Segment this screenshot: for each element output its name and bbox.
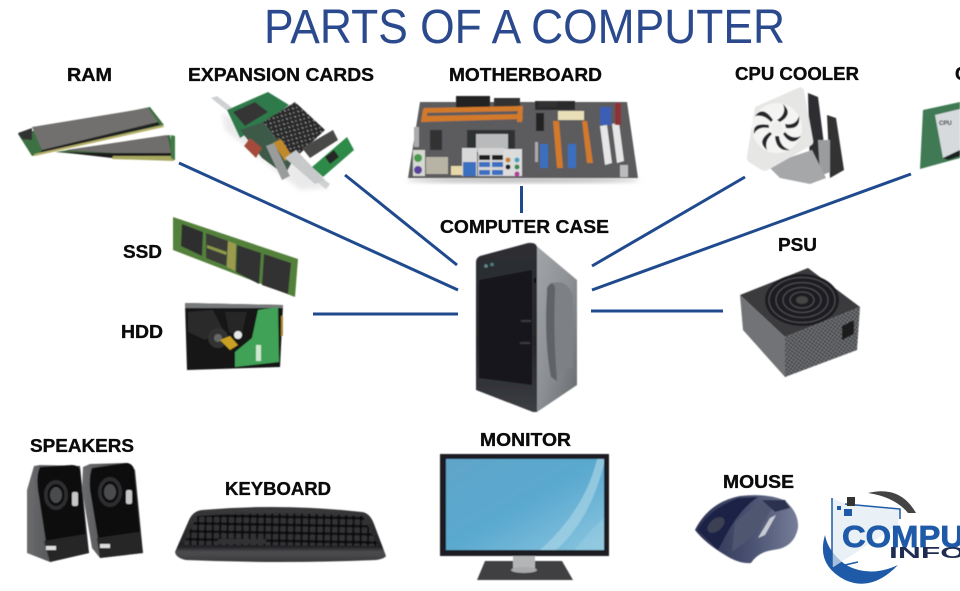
icon: hard disk drive — [185, 303, 283, 370]
icon: expansion cards — [211, 92, 354, 190]
label: RAM: RAM — [67, 64, 112, 85]
icon: computer case — [476, 243, 577, 412]
icon: mouse — [695, 495, 798, 563]
label: SSD: SSD — [123, 241, 162, 262]
icon: CPU, cropped at edge: CPU — [939, 121, 952, 127]
label: speakers: SPEAKERS — [30, 435, 134, 456]
label: motherboard: MOTHERBOARD — [449, 64, 602, 85]
icon: power supply — [740, 268, 860, 377]
icon: CPU, cropped at edge — [920, 102, 960, 169]
icon: speakers — [27, 463, 143, 562]
icon: keyboard — [175, 507, 386, 562]
label: keyboard: KEYBOARD — [225, 478, 331, 499]
label: monitor: MONITOR — [480, 429, 571, 450]
icon: SSD — [173, 217, 298, 297]
icon: monitor — [440, 454, 609, 580]
label: mouse: MOUSE — [723, 471, 794, 492]
logo: Computer Info — [823, 491, 960, 584]
logo: Computer Info: INFO — [889, 545, 960, 562]
label: HDD: HDD — [121, 321, 163, 342]
title: PARTS OF A COMPUTER — [264, 1, 785, 54]
icon: RAM sticks — [18, 107, 175, 161]
icon: motherboard — [407, 96, 639, 183]
label: CPU cooler: CPU COOLER — [735, 63, 859, 84]
label: PSU: PSU — [778, 234, 817, 255]
label: expansion cards: EXPANSION CARDS — [188, 64, 374, 85]
connector lines — [179, 163, 911, 314]
logo: Computer Info: COMPU — [842, 519, 960, 554]
label: computer case: COMPUTER CASE — [440, 216, 609, 237]
icon: CPU cooler — [747, 87, 844, 184]
